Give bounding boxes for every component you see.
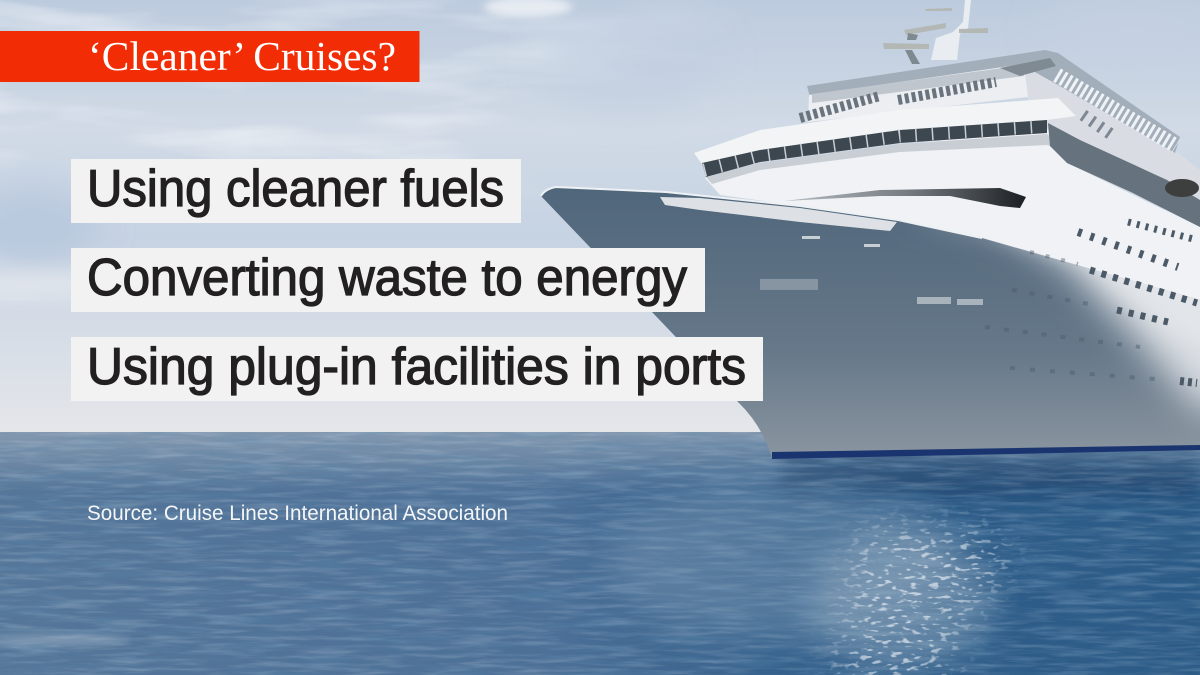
bridge window frames xyxy=(704,126,1047,170)
hull white shading xyxy=(927,228,1200,428)
bridge lower rail xyxy=(706,134,1075,184)
source note: Source: Cruise Lines International Association xyxy=(87,502,508,525)
label: converting waste to energy: Converting waste to energy xyxy=(87,249,687,307)
cruise ship xyxy=(541,0,1200,459)
roof and top deck xyxy=(807,50,1180,153)
title banner: ‘Cleaner’ Cruises? xyxy=(88,33,396,79)
forward deck opening xyxy=(660,197,897,231)
portholes xyxy=(985,222,1197,383)
hull rim highlight xyxy=(541,187,982,238)
label: using cleaner fuels: Using cleaner fuels xyxy=(87,160,504,218)
bow waterline xyxy=(772,445,1200,459)
hull xyxy=(541,187,1200,458)
recessed promenade xyxy=(784,188,1026,208)
hull lights and panels xyxy=(760,236,983,305)
side balconies xyxy=(1048,123,1200,227)
bridge windows xyxy=(702,120,1047,177)
side upper windows xyxy=(1083,115,1112,135)
main white block and side xyxy=(705,128,1200,320)
lifeboat xyxy=(1165,179,1199,197)
title banner xyxy=(0,31,420,82)
bridge wing deck xyxy=(694,98,1076,164)
upper wall behind rail xyxy=(1024,62,1200,235)
label: using plug-in facilities in ports: Using plug-in facilities in ports xyxy=(87,338,746,396)
sea background xyxy=(0,432,1200,675)
sky background xyxy=(0,0,1200,433)
mast and radar xyxy=(883,0,988,64)
railing xyxy=(1057,75,1176,146)
louvre windows xyxy=(800,82,996,118)
